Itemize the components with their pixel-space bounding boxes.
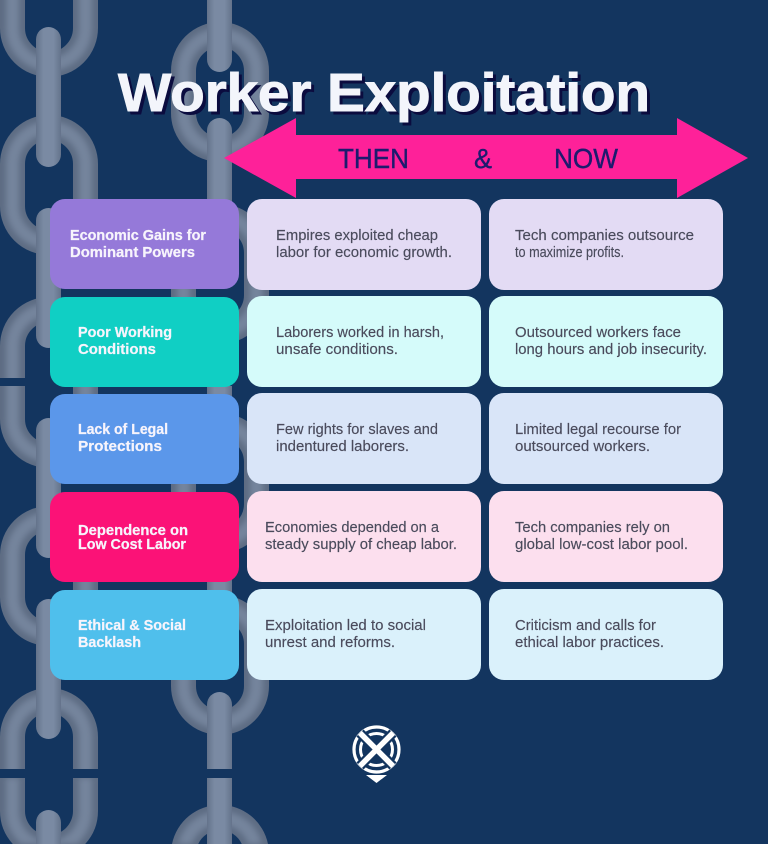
then card: Exploitation led to social	[265, 617, 426, 634]
row 3: legal protections	[50, 393, 723, 484]
label card	[50, 297, 239, 387]
now card: long hours and job insecurity.	[515, 341, 707, 358]
now card	[489, 199, 723, 290]
now card	[489, 393, 723, 484]
label card: Ethical & Social	[78, 617, 186, 634]
double arrow: then and now	[224, 118, 748, 198]
now card	[489, 296, 723, 387]
then card: labor for economic growth.	[276, 244, 452, 261]
then card	[247, 199, 481, 290]
then card	[247, 589, 481, 680]
arrow label: then: THEN	[338, 143, 409, 174]
label card	[50, 492, 239, 582]
row 5: ethical backlash	[50, 589, 723, 680]
label card	[50, 590, 239, 680]
now card	[489, 491, 723, 582]
label card: Poor Working	[78, 324, 172, 341]
label card: Dominant Powers	[70, 244, 195, 261]
then card: unrest and reforms.	[265, 634, 395, 651]
now card: Outsourced workers face	[515, 324, 681, 341]
then card: indentured laborers.	[276, 438, 409, 455]
then card: Few rights for slaves and	[276, 421, 438, 438]
icon: logo pin	[354, 727, 399, 783]
label card	[50, 394, 239, 484]
label card	[50, 199, 239, 289]
now card: Tech companies outsource	[515, 227, 694, 244]
row 4: low cost labor	[50, 491, 723, 582]
now card: Limited legal recourse for	[515, 421, 681, 438]
title: Worker Exploitation	[118, 63, 650, 123]
then card	[247, 393, 481, 484]
now card: global low-cost labor pool.	[515, 536, 688, 553]
then card: unsafe conditions.	[276, 341, 398, 358]
title: Worker Exploitation	[121, 66, 653, 126]
then card: Empires exploited cheap	[276, 227, 438, 244]
chains background	[0, 0, 268, 844]
label card: Lack of Legal	[78, 421, 168, 438]
label card: Dependence on	[78, 522, 188, 539]
now card: to maximize profits.	[515, 244, 624, 261]
arrow label: ampersand: &	[474, 143, 492, 174]
now card: Criticism and calls for	[515, 617, 656, 634]
now card: Tech companies rely on	[515, 519, 670, 536]
now card: outsourced workers.	[515, 438, 650, 455]
then card: Economies depended on a	[265, 519, 440, 536]
now card: ethical labor practices.	[515, 634, 664, 651]
then card: steady supply of cheap labor.	[265, 536, 457, 553]
then card	[247, 491, 481, 582]
row 1: economic gains	[50, 199, 723, 290]
now card	[489, 589, 723, 680]
then card: Laborers worked in harsh,	[276, 324, 444, 341]
row 2: working conditions	[50, 296, 723, 387]
label card: Backlash	[78, 634, 141, 651]
label card: Conditions	[78, 341, 156, 358]
label card: Economic Gains for	[70, 227, 206, 244]
then card	[247, 296, 481, 387]
arrow label: now: NOW	[554, 143, 619, 174]
label card: Low Cost Labor	[78, 536, 186, 553]
label card: Protections	[78, 438, 162, 455]
